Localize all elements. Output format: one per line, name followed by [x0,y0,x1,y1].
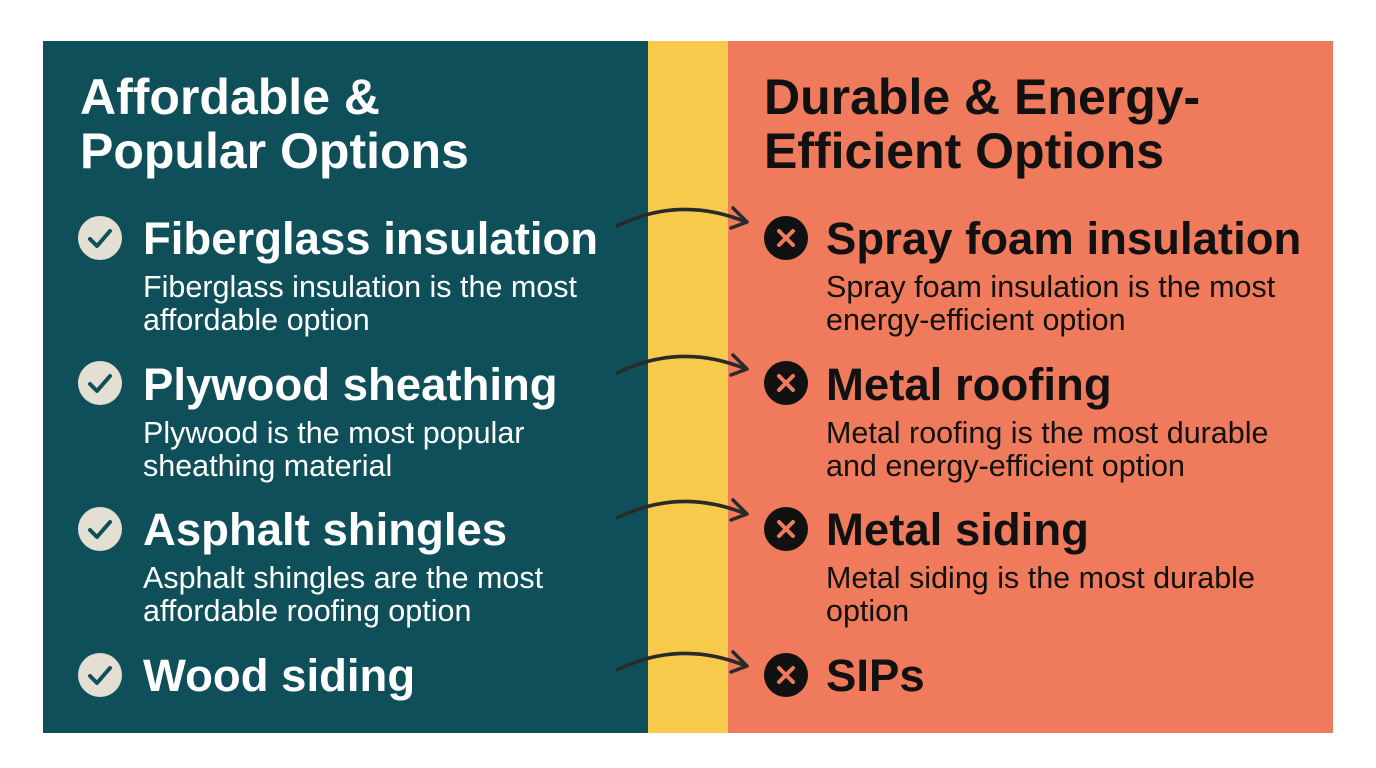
right item: metal siding [764,504,1255,628]
title: right: Durable & Energy- [764,69,1200,125]
description: Fiberglass insulation is the most [143,270,577,304]
description [826,561,1255,628]
right item: spray foam [764,213,1301,337]
heading: Asphalt shingles [143,504,507,555]
description: sheathing material [143,449,392,483]
description: affordable roofing option [143,594,471,628]
arrow 4 [617,652,747,672]
icon: x [764,216,808,260]
description: Plywood is the most popular [143,416,524,450]
description: Asphalt shingles are the most [143,561,543,595]
arrow 2 [617,355,747,375]
heading: Metal roofing [826,359,1112,410]
title: right [764,69,1200,179]
arrow 1 [617,208,747,228]
divider strip: yellow [648,41,728,733]
heading: Spray foam insulation [826,213,1301,264]
description [143,561,543,628]
description [826,270,1275,337]
icon: check [78,653,122,697]
panel: durable (coral) [728,41,1333,733]
description: option [826,594,909,628]
heading: SIPs [826,650,925,701]
icon: check [78,507,122,551]
heading: Fiberglass insulation [143,213,598,264]
icon: x [764,361,808,405]
description: energy-efficient option [826,303,1126,337]
description [143,270,577,337]
icon: x [764,507,808,551]
title: right: Efficient Options [764,123,1164,179]
left item: plywood [78,359,558,483]
icon: check [78,216,122,260]
left item: fiberglass [78,213,598,337]
description: Metal roofing is the most durable [826,416,1268,450]
icon: check [78,361,122,405]
left item: wood siding [78,650,415,701]
description: Spray foam insulation is the most [826,270,1275,304]
title: left [80,69,469,179]
description: and energy-efficient option [826,449,1185,483]
right item: SIPs [764,650,925,701]
heading: Plywood sheathing [143,359,558,410]
title: left: Popular Options [80,123,469,179]
description [143,416,524,483]
heading: Wood siding [143,650,415,701]
heading: Metal siding [826,504,1089,555]
arrow 3 [617,500,747,520]
left item: asphalt [78,504,543,628]
description [826,416,1268,483]
right item: metal roofing [764,359,1268,483]
description: affordable option [143,303,370,337]
description: Metal siding is the most durable [826,561,1255,595]
icon: x [764,653,808,697]
panel: affordable (teal) [43,41,648,733]
title: left: Affordable & [80,69,380,125]
